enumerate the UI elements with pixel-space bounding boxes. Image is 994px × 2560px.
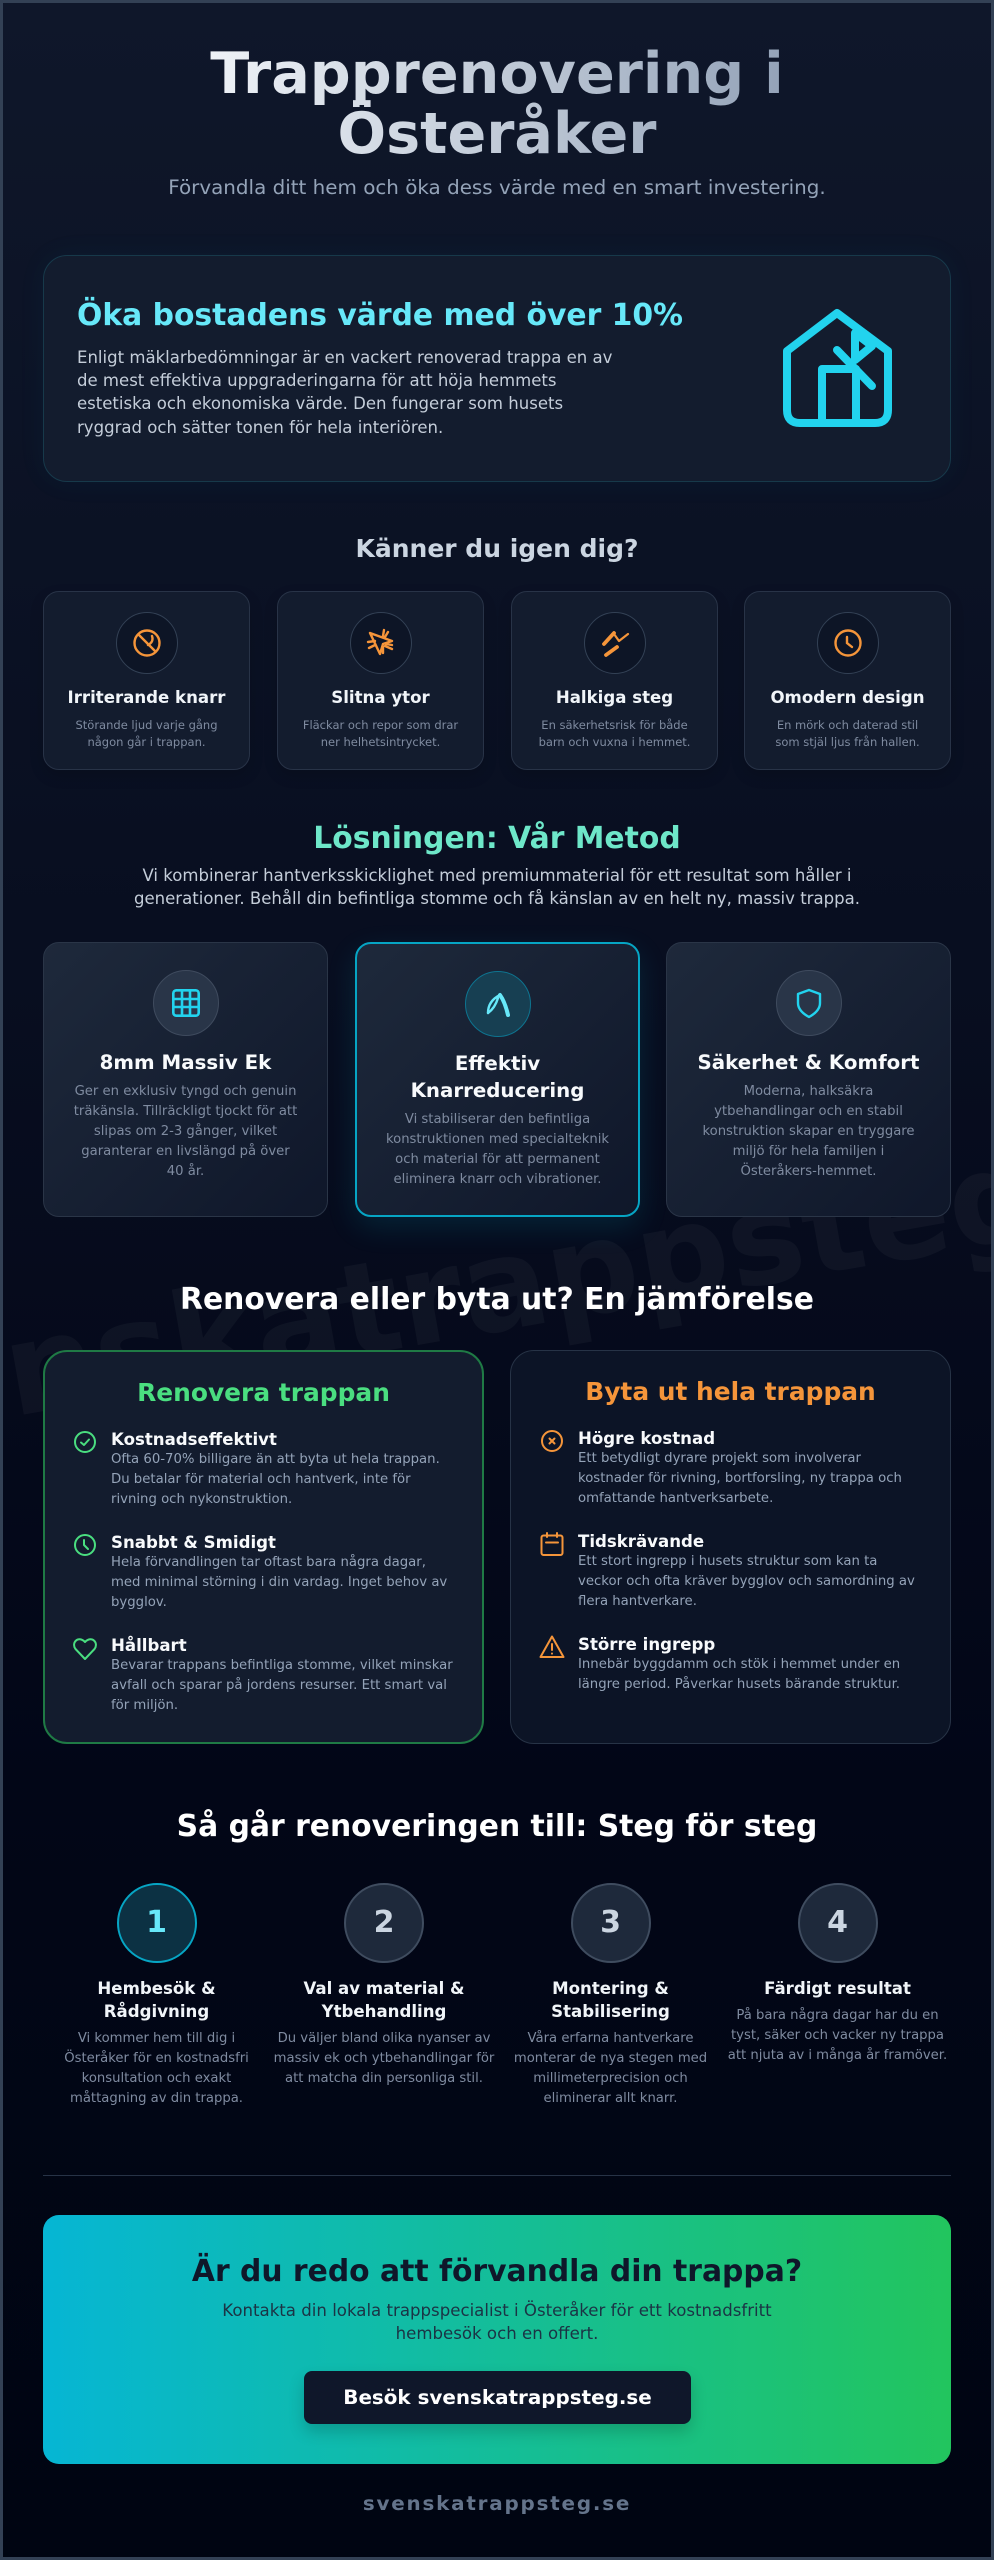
step text [274,2031,494,2086]
item text: Hållbart [111,1636,187,1655]
solution text: konstruktionen med specialteknik [386,1132,609,1147]
solution text: Moderna, halksäkra [744,1084,873,1099]
icon: warning [540,1636,564,1658]
item text: Tidskrävande [578,1532,704,1551]
step title: Färdigt resultat [764,1979,911,1998]
step 3 [514,1883,707,2106]
step title: Hembesök & [97,1979,216,1998]
solution text: miljö för hela familjen i [733,1144,884,1159]
section heading: steps: Så går renoveringen till: Steg för steg [177,1809,817,1844]
step number: 3 [600,1905,621,1940]
problem text: Störande ljud varje gång [75,718,218,732]
solution title: Effektiv [455,1052,540,1075]
panel: hero value [43,255,951,482]
panel: problem 1 [43,591,250,770]
step text: tyst, säker och vacker ny trappa [731,2028,944,2043]
solution text [386,1112,609,1187]
cta text [43,2299,951,2345]
step 2 [274,1883,494,2086]
item text: Högre kostnad [578,1429,715,1448]
step text [514,2030,707,2106]
panel: problem 3 [511,591,718,770]
panel: renovate [43,1350,484,1744]
cta text: hembesök och en offert. [396,2324,598,2343]
solution title [411,1052,584,1102]
item text: rivning och nykonstruktion. [111,1492,292,1507]
problem text: Fläckar och repor som drar [303,718,458,732]
panel: call to action [43,2215,951,2464]
icon: creak reduction [465,971,531,1037]
title [210,41,784,167]
item text: med minimal störning i din vardag. Inget behov av [111,1575,447,1590]
section heading: solution: Lösningen: Vår Metod [313,821,681,856]
solution text: Österåkers-hemmet. [740,1164,876,1179]
problem text: En säkerhetsrisk för både [541,718,688,732]
solution title: Knarreducering [411,1079,584,1102]
solution text: och material för att permanent [395,1152,600,1167]
item: sustainable [73,1636,453,1713]
item text [111,1533,447,1610]
section heading: problems: Känner du igen dig? [355,534,638,563]
item text: veckor och ofta kräver bygglov och samordning av [578,1574,915,1589]
problem text: ner helhetsintrycket. [321,735,440,749]
problem text [539,718,690,749]
item text: Innebär byggdamm och stök i hemmet under en [578,1657,900,1672]
step text: Våra erfarna hantverkare [528,2031,693,2046]
icon: oak grid [153,970,219,1036]
item text [578,1429,902,1506]
step text: måttagning av din trappa. [70,2091,243,2106]
solution title: 8mm Massiv Ek [100,1051,271,1074]
item text: Du betalar för material och hantverk, inte för [111,1472,411,1487]
footer: svenskatrappsteg.se [363,2492,631,2515]
step text: att njuta av i många år framöver. [728,2048,947,2063]
icon: worn surface [350,612,412,674]
step number [116,1883,196,1963]
cta button [304,2371,691,2424]
problem text [75,718,218,749]
step title: Ytbehandling [322,2002,446,2021]
item text: Hela förvandlingen tar oftast bara några dagar, [111,1555,426,1570]
step number [570,1883,650,1963]
icon: no noise [116,612,178,674]
hero text: Enligt mäklarbedömningar är en vackert renoverad trappa en av [77,348,612,367]
step number: 1 [146,1905,167,1940]
solution text: träkänsla. Tillräckligt tjockt för att [74,1104,297,1119]
problem text: som stjäl ljus från hallen. [775,735,920,749]
problem title: Omodern design [770,688,925,707]
problem text [775,718,920,749]
step text [64,2031,249,2106]
step text: På bara några dagar har du en [736,2008,939,2023]
step number [798,1883,878,1963]
icon: shield [776,970,842,1036]
step text [724,2006,951,2066]
step text: Österåker för en kostnadsfri [64,2051,249,2066]
step text: Du väljer bland olika nyanser av [278,2031,490,2046]
solution intro text: generationer. Behåll din befintliga stomme och få känslan av en helt ny, massiv trappa. [134,889,860,908]
title: Österåker [337,101,657,167]
subtitle: Förvandla ditt hem och öka dess värde med en smart investering. [168,176,826,199]
step number: 4 [827,1905,848,1940]
item text: kostnader för rivning, bortforsling, ny trappa och [578,1471,902,1486]
problem text: barn och vuxna i hemmet. [539,735,690,749]
step text: massiv ek och ytbehandlingar för [274,2051,494,2066]
item: fast [74,1533,447,1610]
item: higher cost [541,1429,902,1506]
item text [111,1430,440,1507]
cta heading: Är du redo att förvandla din trappa? [192,2254,802,2289]
panel: problem 4 [744,591,951,770]
icon: slippery steps [584,612,646,674]
step title: Stabilisering [551,2002,670,2021]
cta button: Besök svenskatrappsteg.se [343,2386,652,2409]
panel heading: Renovera trappan [137,1378,390,1407]
hero text: estetiska och ekonomiska värde. Den fungerar som husets [77,394,563,413]
item text: flera hantverkare. [578,1594,697,1609]
hero heading: Öka bostadens värde med över 10% [77,298,683,333]
icon: clock [74,1534,96,1556]
icon: heart [73,1638,97,1660]
item text [578,1532,915,1609]
solution text: Vi stabiliserar den befintliga [405,1112,590,1127]
step text: att matcha din personliga stil. [285,2071,483,2086]
icon: check [74,1431,96,1453]
item text: Bevarar trappans befintliga stomme, vilket minskar [111,1658,453,1673]
step 4 [728,1883,947,2063]
problem text: En mörk och daterad stil [777,718,918,732]
item text: bygglov. [111,1595,167,1610]
solution text: garanterar en livslängd på över [81,1144,290,1159]
item text: Ofta 60-70% billigare än att byta ut hela trappan. [111,1452,440,1467]
step number: 2 [374,1905,394,1940]
hero text: ryggrad och sätter tonen för hela interiören. [77,418,443,437]
step title: Rådgivning [104,2002,209,2021]
step 1 [64,1883,249,2106]
step title [303,1979,465,2021]
item text: längre period. Påverkar husets bärande struktur. [578,1677,900,1692]
cta text: Kontakta din lokala trappspecialist i Österåker för ett kostnadsfritt [222,2301,772,2320]
solution text: eliminera knarr och vibrationer. [394,1172,602,1187]
step text: monterar de nya stegen med [514,2051,707,2066]
problem title: Irriterande knarr [68,688,225,707]
solution title: Säkerhet & Komfort [698,1051,919,1074]
panel heading: Byta ut hela trappan [585,1377,876,1406]
icon: cross [541,1430,563,1452]
section heading: comparison: Renovera eller byta ut? En jämförelse [180,1282,814,1317]
solution text: 40 år. [167,1164,204,1179]
solution text: Ger en exklusiv tyngd och genuin [75,1084,296,1099]
icon: calendar [540,1532,564,1556]
step text: millimeterprecision och [533,2071,688,2086]
step text: Vi kommer hem till dig i [78,2031,235,2046]
panel: solution 3 [666,942,951,1217]
item text: Större ingrepp [578,1635,715,1654]
problem text: någon går i trappan. [87,735,206,749]
panel: replace [510,1350,951,1744]
panel: solution 2 highlighted [355,942,640,1217]
step title: Montering & [552,1979,669,1998]
hero text: de mest effektiva uppgraderingarna för att höja hemmets [77,371,557,390]
item text: omfattande hantverksarbete. [578,1491,773,1506]
panel: solution 1 [43,942,328,1217]
item text [111,1636,453,1713]
title: Trapprenovering i [210,41,784,107]
problem title: Slitna ytor [331,688,430,707]
step title [551,1979,670,2021]
item text: Ett betydligt dyrare projekt som involverar [578,1451,861,1466]
icon: house [783,308,892,427]
step title: Val av material & [303,1979,465,1998]
step number [344,1883,424,1963]
item: time consuming [540,1532,915,1609]
item text [578,1635,900,1692]
item text: Snabbt & Smidigt [111,1533,276,1552]
solution text: ytbehandlingar och en stabil [714,1104,903,1119]
item: bigger intervention [540,1635,900,1692]
icon: clock [817,612,879,674]
item text: avfall och sparar på jordens resurser. Ett smart val [111,1678,447,1693]
solution text [74,1084,297,1179]
solution text [702,1084,915,1179]
problem text [303,718,458,749]
item text: Ett stort ingrepp i husets struktur som kan ta [578,1554,877,1569]
panel: problem 2 [277,591,484,770]
solution intro text: Vi kombinerar hantverksskicklighet med premiummaterial för ett resultat som håller i [142,866,852,885]
problem title: Halkiga steg [556,688,673,707]
step title [97,1979,216,2021]
item: cost effective [74,1430,440,1507]
step text: konsultation och exakt [82,2071,231,2086]
solution intro text [134,866,860,908]
item text: för miljön. [111,1698,178,1713]
step text: eliminerar allt knarr. [544,2091,677,2106]
solution text: slipas om 2-3 gånger, vilket [94,1124,277,1139]
item text: Kostnadseffektivt [111,1430,277,1449]
hero text [77,348,612,437]
solution text: konstruktion skapar en tryggare [702,1124,915,1139]
